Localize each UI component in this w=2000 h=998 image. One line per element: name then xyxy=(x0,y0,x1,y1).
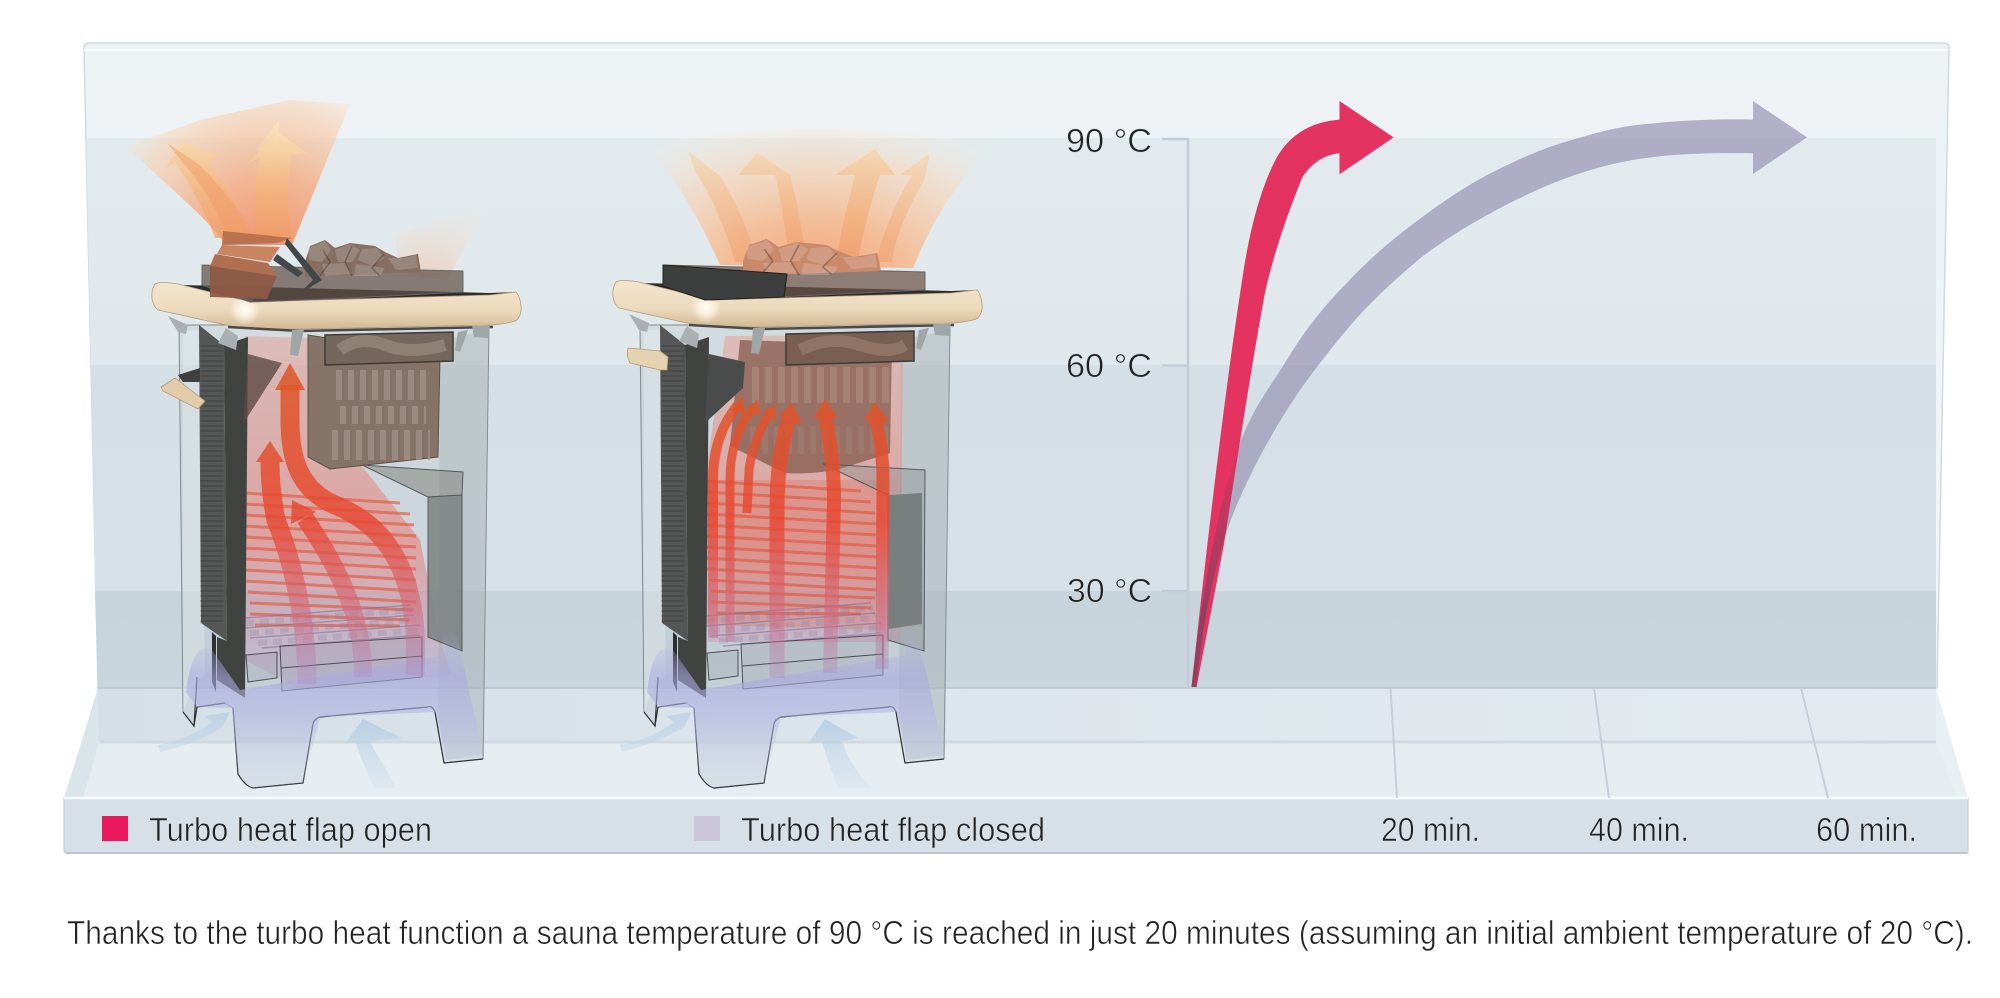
cool air arrows entering xyxy=(620,712,871,788)
red heat glow inside body xyxy=(245,336,452,690)
stone tray glass xyxy=(202,265,463,302)
hot air arrows xyxy=(256,363,416,684)
temperature band 30-60 xyxy=(91,365,1936,591)
curve: flap open, crimson arrow xyxy=(1192,101,1394,687)
door handle xyxy=(161,368,205,409)
stones on top tray xyxy=(743,239,881,276)
dark louvred side panel xyxy=(199,325,282,698)
temperature band 0-30 xyxy=(95,591,1936,688)
closed flap xyxy=(663,265,787,300)
right side box xyxy=(362,465,463,651)
heater body shell xyxy=(640,325,950,788)
open flap louvres xyxy=(210,231,322,299)
hot air arrows xyxy=(713,395,889,678)
right side panel xyxy=(823,464,925,651)
door handle xyxy=(627,348,668,370)
x axis grid lines xyxy=(1390,688,1828,798)
backboard glass panel xyxy=(84,43,1949,688)
cold air glow at base xyxy=(647,600,944,788)
cold air glow at base xyxy=(186,600,483,788)
heating coils xyxy=(706,481,877,614)
curve overlap shade xyxy=(1192,448,1238,687)
heating coils xyxy=(245,493,416,626)
legend: flap open: Turbo heat flap open xyxy=(149,811,432,848)
floor front face xyxy=(64,798,1968,853)
heater 1: turbo heat flap open xyxy=(127,100,521,788)
x axis label 40 min.: 40 min. xyxy=(1589,811,1689,848)
cool air arrows entering xyxy=(158,712,402,788)
stones on top tray xyxy=(305,240,421,277)
y axis label 60 °C: 60 °C xyxy=(1066,347,1152,384)
dark louvred side panel xyxy=(660,325,745,698)
grating and lower box xyxy=(706,603,883,689)
legend: flap closed: Turbo heat flap closed xyxy=(741,811,1045,848)
x axis label 60 min.: 60 min. xyxy=(1816,811,1917,848)
heat plume above closed flap xyxy=(643,130,1000,268)
heat plume above open flap xyxy=(127,100,500,280)
top rim xyxy=(613,280,982,354)
y axis label 90 °C: 90 °C xyxy=(1066,122,1152,159)
y axis label 30 °C: 30 °C xyxy=(1067,572,1152,609)
floor shelf xyxy=(64,688,1968,853)
y axis with temperature ticks xyxy=(1162,139,1188,688)
stone basket xyxy=(308,332,453,469)
x axis label 20 min.: 20 min. xyxy=(1381,811,1480,848)
top rim xyxy=(152,282,521,356)
stone basket xyxy=(730,331,914,473)
stone tray glass xyxy=(663,265,925,300)
grating and lower box xyxy=(245,605,422,691)
temperature band 60-90 xyxy=(86,138,1936,365)
heater body shell xyxy=(179,325,489,788)
heater 2: turbo heat flap closed xyxy=(613,130,1000,788)
red heat glow inside body xyxy=(706,334,903,642)
curve: flap closed, grey-violet arrow xyxy=(1192,101,1807,687)
